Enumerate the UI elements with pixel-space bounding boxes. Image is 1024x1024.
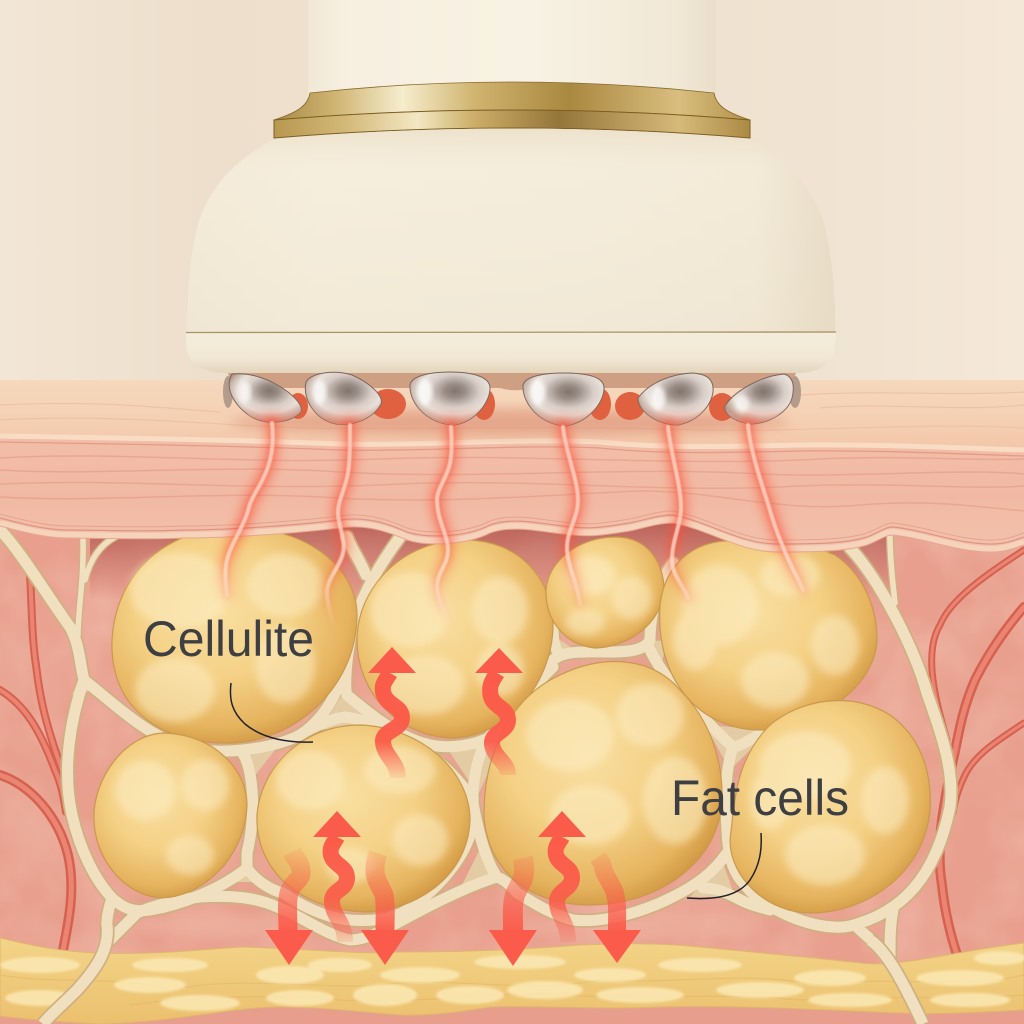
panel: tissue below the skin bbox=[0, 510, 1024, 980]
panel: septa connective strands bbox=[0, 530, 951, 957]
label: Cellulite: Cellulite bbox=[143, 611, 314, 667]
silver roller 2 bbox=[305, 372, 381, 424]
beam inner glow bbox=[225, 423, 803, 628]
gold collar bbox=[274, 82, 750, 138]
panel: fat cells bbox=[94, 527, 930, 913]
blood vessels bbox=[0, 550, 1024, 958]
lower strands over fat band bbox=[43, 925, 923, 1024]
label: Fat cells: Fat cells bbox=[671, 770, 849, 826]
glowing back rollers bbox=[223, 376, 801, 421]
beam core bbox=[225, 423, 803, 628]
beam glow bbox=[225, 423, 803, 628]
dermis lower lip bbox=[0, 511, 1024, 552]
fat band creases bbox=[0, 975, 1024, 1005]
arrow down 2 bbox=[361, 853, 409, 965]
massage rollers bbox=[223, 372, 801, 426]
roller carrier bbox=[228, 373, 796, 390]
epidermis fine lines bbox=[0, 392, 1024, 430]
silver roller 5 bbox=[638, 373, 713, 425]
silver roller 3 bbox=[410, 372, 490, 425]
label: Cellulite bbox=[143, 611, 314, 742]
background wall bbox=[0, 0, 1024, 390]
energy beams from rollers bbox=[225, 423, 803, 628]
silver roller 4 bbox=[523, 373, 604, 426]
epidermis lip highlight bbox=[0, 436, 1024, 450]
arrow up 2 bbox=[475, 648, 523, 775]
silver roller 6 bbox=[725, 374, 793, 424]
fat band lobes bbox=[0, 951, 1024, 1011]
device base ring bbox=[186, 333, 836, 373]
device dome bbox=[187, 128, 835, 333]
handle neck bbox=[308, 0, 716, 100]
arrow down 3 bbox=[489, 858, 537, 966]
arrow up 4 bbox=[538, 811, 586, 942]
arrow up 1 bbox=[368, 647, 416, 778]
contact shadow under rollers bbox=[230, 409, 790, 435]
arrow up 3 bbox=[313, 811, 361, 942]
silver roller 1 bbox=[229, 374, 301, 422]
arrows: upward flow in upper cells bbox=[368, 647, 523, 778]
arrows: flow through lower cells bbox=[265, 811, 641, 966]
arrow down 4 bbox=[593, 857, 641, 963]
dermis wavy fibres bbox=[0, 456, 1024, 511]
panel: skin layers bbox=[0, 380, 1024, 552]
epidermis surface bbox=[0, 380, 1024, 448]
device handle bbox=[186, 0, 836, 373]
dermis layer bbox=[0, 432, 1024, 552]
panel: subcutaneous fat band bbox=[0, 925, 1024, 1024]
arrow down 1 bbox=[265, 852, 313, 965]
fat cell lobes bbox=[115, 552, 909, 885]
label: Fat cells bbox=[671, 770, 849, 899]
fat cell bodies bbox=[94, 527, 930, 913]
